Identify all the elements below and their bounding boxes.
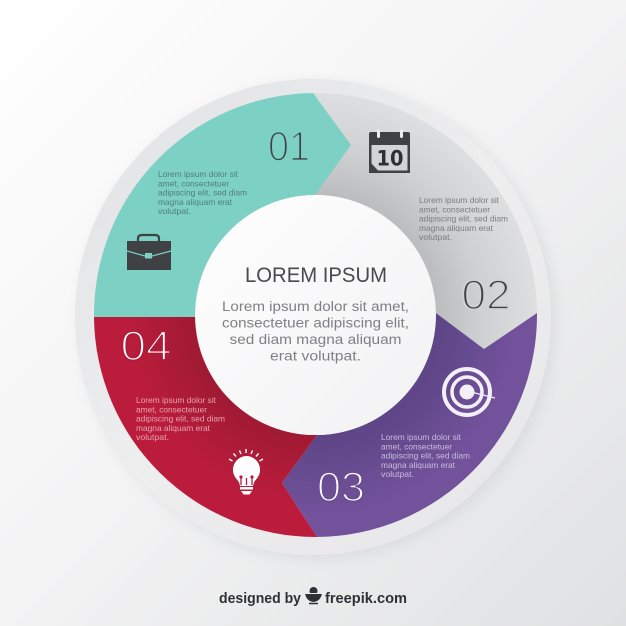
text block 03: Lorem ipsum dolor sit: [381, 432, 462, 442]
text block 03: adipiscing elit, sed diam: [381, 451, 470, 461]
number 03: 03: [317, 463, 365, 510]
footer credit: designed by: [219, 590, 302, 607]
footer credit: freepik.com: [325, 590, 407, 607]
text block 01: amet, consectetuer: [158, 178, 229, 188]
panel: 03 purple segment: [282, 313, 537, 537]
text block 02: magna aliquam erat: [419, 223, 494, 233]
icon: calendar: [369, 129, 410, 173]
center text: sed diam magna aliquam: [230, 332, 402, 348]
text block 02: adipiscing elit, sed diam: [419, 214, 508, 224]
text block 04: volutpat.: [136, 432, 169, 442]
center text: consectetuer adipiscing elit,: [222, 316, 409, 332]
text block 03: magna aliquam erat: [381, 460, 456, 470]
number 01: 01: [268, 122, 310, 170]
text block 01: adipiscing elit, sed diam: [158, 188, 247, 198]
center heading: LOREM IPSUM: [245, 264, 387, 287]
text block 01: volutpat.: [158, 206, 191, 216]
text block 01: [158, 169, 247, 216]
footer credit: [219, 587, 407, 607]
icon: light bulb: [229, 449, 263, 494]
text block 02: [419, 195, 508, 242]
text block 04: adipiscing elit, sed diam: [136, 414, 225, 424]
text block 03: [381, 432, 470, 479]
text block 04: Lorem ipsum dolor sit: [136, 395, 217, 405]
number 04: 04: [120, 322, 172, 369]
center circle: [196, 195, 436, 435]
center text: Lorem ipsum dolor sit amet,: [222, 299, 409, 315]
text block 04: [136, 395, 225, 442]
outer ring: [75, 79, 556, 559]
panel: 02 gray segment: [313, 93, 537, 349]
text block 03: volutpat.: [381, 469, 414, 479]
icon: target: [444, 369, 495, 415]
text block 02: Lorem ipsum dolor sit: [419, 195, 500, 205]
panel: 04 red segment: [94, 317, 317, 537]
text block 04: amet, consectetuer: [136, 404, 207, 414]
text block 01: Lorem ipsum dolor sit: [158, 169, 239, 179]
icon: freepik logo: [304, 587, 323, 604]
number 02: 02: [462, 271, 510, 318]
text block 03: amet, consectetuer: [381, 441, 452, 451]
center text: [222, 299, 409, 364]
text block 04: magna aliquam erat: [136, 423, 211, 433]
text block 01: magna aliquam erat: [158, 197, 233, 207]
icon: calendar: 10: [376, 146, 404, 170]
center text: erat volutpat.: [270, 348, 361, 364]
text block 02: volutpat.: [419, 232, 452, 242]
panel: 01 teal segment: [94, 93, 351, 317]
text block 02: amet, consectetuer: [419, 204, 490, 214]
icon: briefcase: [127, 235, 171, 270]
